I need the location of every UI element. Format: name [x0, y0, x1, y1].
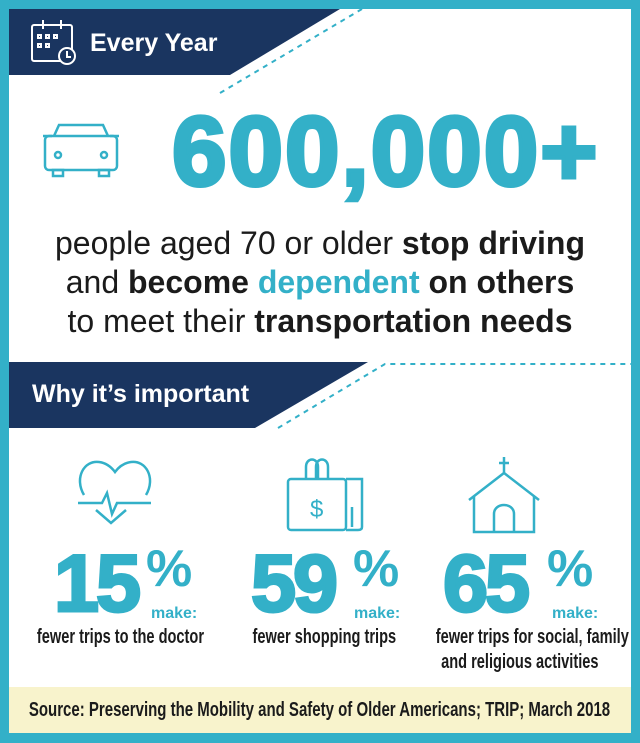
- text block: description: people aged 70 or older stop driving: [55, 225, 585, 261]
- stat: 65%: 65: [443, 539, 527, 629]
- label: shopping: fewer shopping trips: [252, 626, 396, 648]
- text block: description: and become dependent on others: [66, 264, 574, 300]
- heading: Every Year: Every Year: [90, 29, 217, 57]
- footer: source: [9, 687, 631, 733]
- text block: description: to meet their transportation needs: [67, 303, 572, 339]
- heading: why it's important: Why it’s important: [32, 380, 249, 408]
- icon: car: [43, 124, 119, 178]
- stat: 65%: [443, 539, 598, 629]
- icon: shopping bag: [286, 458, 364, 532]
- stat: 15%: %: [146, 540, 192, 598]
- stat: 59%: [251, 539, 400, 629]
- label: doctor: fewer trips to the doctor: [36, 626, 204, 648]
- icon: shopping bag: $: [310, 496, 323, 523]
- stat: 65%: make:: [552, 605, 598, 622]
- footer: source: Source: Preserving the Mobility and Safety of Older Americans; TRIP; March 2018: [29, 699, 611, 721]
- label: social: [436, 626, 629, 673]
- label: social: fewer trips for social, family: [436, 626, 629, 648]
- stat: 15%: [54, 539, 197, 629]
- icon: calendar: [31, 20, 76, 65]
- big number: 600,000+: [172, 96, 599, 206]
- icon: heart: [78, 460, 152, 524]
- text block: description: [55, 225, 585, 339]
- stat: 15%: make:: [151, 605, 197, 622]
- stat: 15%: 15: [54, 539, 138, 629]
- label: social: and religious activities: [441, 651, 599, 673]
- stat: 59%: make:: [354, 605, 400, 622]
- stat: 59%: 59: [251, 539, 335, 629]
- stat: 59%: %: [353, 540, 399, 598]
- icon: church: [468, 457, 540, 534]
- stat: 65%: %: [547, 540, 593, 598]
